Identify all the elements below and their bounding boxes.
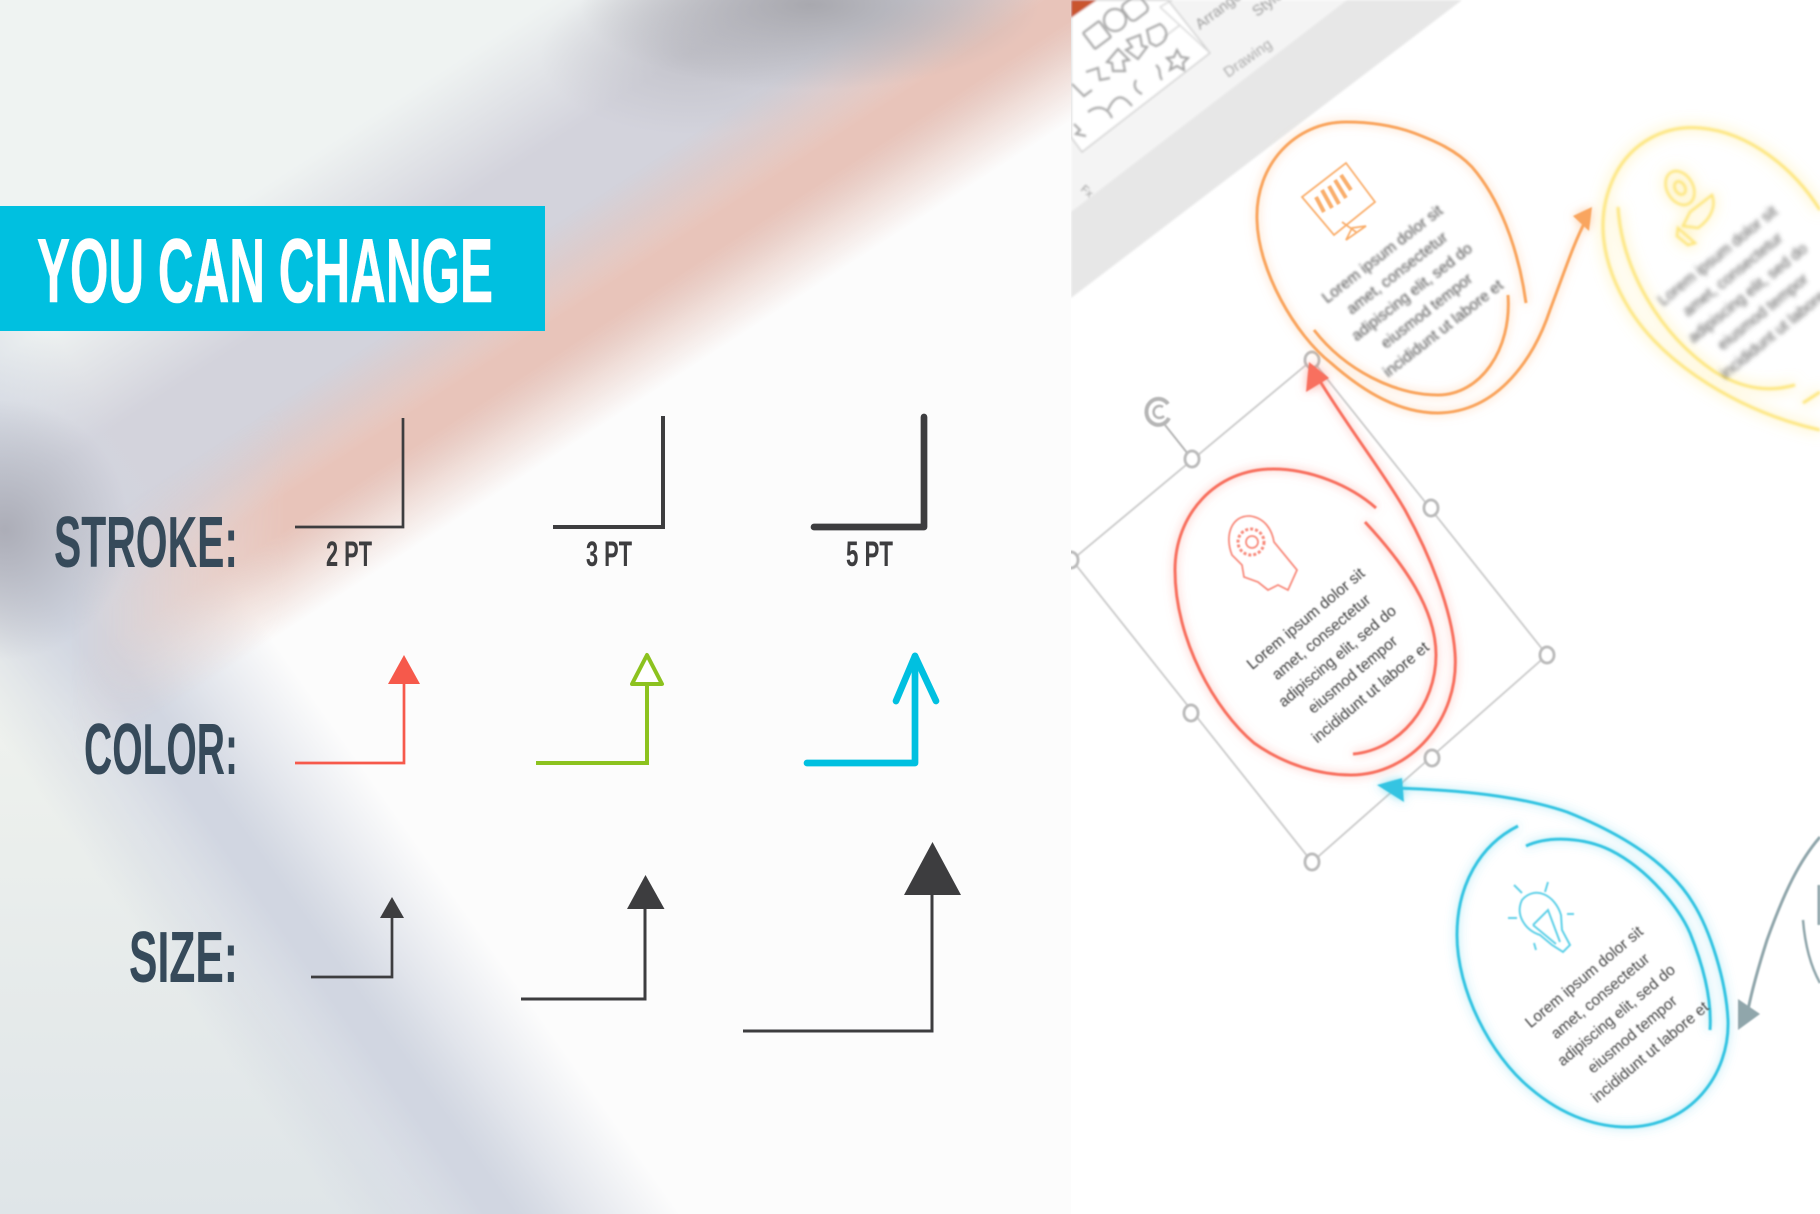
arrow: medium (521, 875, 664, 999)
grey arrow (1738, 837, 1820, 1030)
row: stroke (54, 416, 924, 583)
text block: Lorem ipsum dolor sit (1244, 565, 1369, 673)
text block: Lorem ipsum dolor sit (1319, 202, 1447, 307)
text block: amet, consectetur (1680, 230, 1786, 320)
row: size (129, 842, 961, 1031)
text block: incididunt ut labore et (1380, 277, 1507, 381)
icon: light bulb (1508, 882, 1574, 952)
text block: Lorem ipsum dolor sit (1655, 203, 1781, 310)
label 2 pt: 2 PT (326, 535, 372, 574)
label 3 pt: 3 PT (586, 535, 632, 574)
step: blue (1377, 778, 1728, 1127)
heading: stroke: STROKE: (54, 503, 238, 583)
banner title: YOU CAN CHANGE (37, 221, 493, 322)
ribbon labels (1078, 0, 1292, 200)
red outline (1175, 362, 1455, 775)
text block: eiusmod tempor (1378, 271, 1476, 352)
text block: eiusmod tempor (1715, 271, 1812, 354)
label 5 pt: 5 PT (846, 535, 893, 574)
orange outline (1257, 122, 1592, 413)
stroke sample 3 pt (553, 416, 663, 527)
selection box (1064, 352, 1554, 870)
icon: head with gear (1229, 516, 1297, 590)
icon: monitor chart (1302, 163, 1375, 240)
text block: adipiscing elit, sed do (1554, 962, 1679, 1070)
banner (0, 206, 545, 331)
text block: Lorem ipsum dolor sit (1522, 923, 1647, 1032)
arrow: red (295, 655, 420, 763)
step: red (1175, 362, 1455, 775)
resize handles (1064, 352, 1554, 870)
text block: incididunt ut labore et (1589, 998, 1713, 1107)
icon: coin in hand (1660, 166, 1713, 245)
text block: eiusmod tempor (1305, 633, 1401, 717)
ribbon labels: Fx (1078, 183, 1096, 200)
arrow: green (536, 655, 662, 763)
arrow: small (311, 897, 404, 977)
text block: amet, consectetur (1269, 592, 1374, 684)
ribbon (1071, 0, 1462, 298)
text block: eiusmod tempor (1585, 993, 1681, 1077)
step: yellow (1603, 128, 1820, 430)
yellow outline (1603, 128, 1820, 430)
row: color (84, 655, 936, 790)
text block: amet, consectetur (1344, 229, 1451, 318)
text block: amet, consectetur (1548, 951, 1653, 1043)
text block: adipiscing elit, sed do (1685, 240, 1811, 347)
blue outline (1377, 778, 1728, 1127)
text block: incididunt ut labore et (1309, 639, 1433, 747)
heading: size: SIZE: (129, 918, 238, 998)
ribbon labels: Drawing (1221, 36, 1275, 81)
icons: shape gallery (1072, 0, 1188, 136)
stroke sample 2 pt (295, 418, 403, 527)
arrow: large (743, 842, 961, 1031)
stroke sample 5 pt (814, 417, 924, 527)
heading: color: COLOR: (84, 710, 238, 790)
arrow: blue (807, 656, 936, 763)
panel: software screenshot (1064, 0, 1820, 1214)
step: grey (1738, 837, 1820, 1030)
step: orange (1257, 122, 1592, 413)
text block: adipiscing elit, sed do (1349, 240, 1476, 345)
rotate handle (1146, 399, 1192, 459)
text block: adipiscing elit, sed do (1275, 603, 1400, 711)
blurred background (0, 0, 1071, 1214)
